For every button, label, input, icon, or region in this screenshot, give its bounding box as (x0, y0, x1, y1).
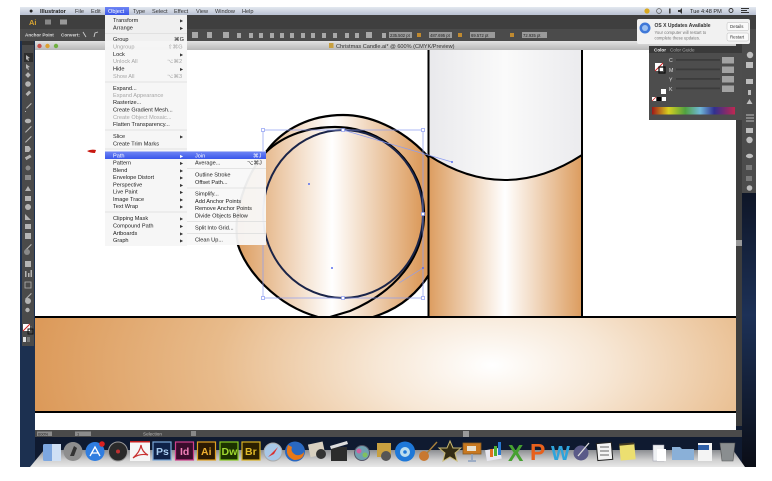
icon: guitar (419, 442, 437, 461)
object menu: Create Gradient Mesh... (113, 108, 173, 114)
notification: OS X updates: complete these updates. (654, 36, 700, 40)
menu bar: Edit (91, 9, 101, 15)
object menu: ▶ (180, 231, 184, 236)
tools panel: ↶ ⬚ (24, 325, 32, 330)
color panel: K (669, 87, 673, 93)
object menu: Expand... (113, 86, 137, 92)
color panel: Color (654, 48, 666, 53)
object menu: ▶ (180, 216, 184, 221)
notification: OS X updates: OS X Updates Available (654, 23, 711, 29)
object menu: Flatten Transparency... (113, 122, 170, 128)
icon: word W: W (551, 443, 570, 465)
object menu: Create Object Mosaic... (113, 115, 172, 121)
control bar: 235.502 pt (390, 33, 411, 38)
object menu: ▶ (180, 197, 184, 202)
icon: bridge: Br (245, 446, 257, 458)
object menu: Graph (113, 238, 129, 244)
icon: safari (264, 443, 282, 461)
icon: document stack (653, 445, 666, 461)
icon: document file (698, 443, 712, 461)
dock shelf (30, 450, 745, 467)
menu bar: Window (215, 9, 236, 15)
icon: dashboard (108, 442, 128, 461)
object menu: ▶ (180, 182, 184, 188)
path submenu: Remove Anchor Points (195, 206, 252, 212)
notification: OS X updates: Restart (730, 34, 745, 40)
color panel: Y (669, 78, 673, 84)
icon: aperture (377, 443, 391, 461)
object menu: ▶ (180, 175, 184, 180)
tools panel (22, 41, 34, 346)
icon: trash (720, 443, 735, 461)
menu bar: Select (152, 9, 168, 15)
object menu: Lock (113, 52, 125, 58)
object menu: Path (113, 154, 125, 160)
object menu: ▶ (180, 52, 184, 57)
icon: stickies note (619, 442, 636, 461)
status bar: Selection (143, 432, 162, 437)
object menu: Expand Appearance (113, 93, 163, 99)
icon: clapperboard (330, 441, 348, 461)
path submenu: Clean Up... (195, 238, 223, 244)
object menu: Image Trace (113, 197, 144, 203)
menu bar: Type (133, 9, 145, 15)
object menu: ▶ (180, 18, 184, 23)
object menu: Pattern (113, 160, 131, 166)
red mark (87, 150, 96, 153)
icon: photoshop: Ps (156, 446, 169, 458)
control bar: 69.572 pt (471, 33, 489, 38)
right side panel dock (736, 41, 756, 426)
candle body (428, 50, 582, 320)
color panel: C (669, 58, 673, 64)
object menu: ▶ (180, 224, 184, 228)
icon: pen and ink (574, 443, 589, 460)
path submenu: ⌘J (253, 152, 262, 160)
icon: finder (43, 444, 61, 461)
path submenu: Offset Path... (195, 180, 228, 186)
icon: applications folder (672, 447, 694, 460)
object menu: ⇧⌘G (168, 44, 183, 50)
notification: OS X updates (637, 19, 750, 44)
icon: acrobat (130, 441, 150, 461)
object menu: Compound Path (113, 224, 153, 230)
control bar: Anchor Point (25, 32, 54, 38)
object menu: ▶ (180, 26, 184, 30)
selection bounding box and handles (262, 128, 453, 300)
icon: color wheel app (354, 446, 370, 460)
icon: indesign (176, 442, 194, 460)
object menu: ⌥⌘3 (167, 73, 182, 80)
control bar: 72.935 pt (523, 33, 541, 38)
path submenu: Split Into Grid... (195, 226, 234, 232)
menu bar: Tue 4:48 PM (690, 9, 722, 15)
control bar (20, 29, 756, 41)
menu bar: ● (29, 8, 33, 15)
path submenu: Divide Objects Below (195, 214, 249, 220)
object menu: Blend (113, 168, 127, 174)
icon: dreamweaver: Dw (222, 446, 238, 458)
icon: illustrator (198, 442, 216, 460)
object menu: ⌘G (174, 36, 184, 43)
menu bar: Illustrator (40, 9, 67, 15)
status bar (35, 430, 742, 437)
icon: excel X: X (508, 440, 524, 466)
object menu: Artboards (113, 231, 137, 237)
notification: OS X updates: Details (730, 24, 744, 29)
icon: numbers (485, 442, 502, 461)
object menu: ▶ (180, 238, 184, 243)
object menu: ▶ (180, 204, 184, 209)
document title bar: Christmas Candle.ai* @ 600% (CMYK/Preview) (336, 44, 455, 50)
path submenu: Outline Stroke (195, 172, 230, 178)
control bar: Convert: (61, 32, 80, 38)
object menu: ▶ (180, 134, 184, 139)
icon: illustrator: Ai (201, 446, 212, 458)
object menu: Transform (113, 18, 139, 24)
illustrator canvas (33, 50, 738, 430)
icon: photoshop (153, 442, 171, 460)
path submenu (187, 151, 266, 245)
object menu: Hide (113, 66, 125, 72)
object menu: Show All (113, 74, 134, 80)
application bar: Ai (29, 18, 36, 27)
object menu: Arrange (113, 26, 133, 32)
path submenu: Join (195, 154, 205, 160)
object menu: Clipping Mask (113, 216, 148, 222)
path submenu: Add Anchor Points (195, 199, 241, 205)
object menu: Group (113, 37, 129, 43)
control bar: 487.695 pt (430, 33, 451, 38)
object menu: Create Trim Marks (113, 142, 159, 148)
icon: indesign: Id (180, 446, 189, 458)
path submenu: Average... (195, 160, 221, 166)
menu bar: Object (108, 9, 125, 15)
menu bar: Effect (174, 9, 189, 15)
document title bar (35, 41, 736, 50)
object menu: Envelope Distort (113, 175, 154, 181)
icon: keynote (463, 443, 481, 461)
notification: OS X updates: Your computer will restart to (654, 30, 707, 35)
object menu: Live Paint (113, 190, 138, 196)
icon: iphoto (308, 441, 326, 459)
color panel: M (669, 68, 673, 74)
menu bar: Help (242, 9, 254, 15)
icon: bridge (242, 442, 260, 460)
object menu (105, 15, 187, 246)
object menu: Text Wrap (113, 204, 138, 210)
object menu: Slice (113, 134, 125, 140)
color panel (649, 46, 742, 120)
object menu: ▶ (180, 168, 184, 173)
icon: launchpad (64, 442, 82, 461)
icon: reminders list (596, 442, 613, 461)
color panel: Color Guide (670, 48, 695, 53)
icon: firefox (285, 442, 305, 462)
object menu: Rasterize... (113, 100, 142, 106)
menu bar: View (196, 9, 209, 15)
menu bar: File (75, 9, 84, 15)
icon: imovie star (439, 441, 461, 461)
icon: dvd player (395, 442, 415, 462)
object menu: ▶ (180, 66, 184, 72)
application bar (20, 15, 756, 29)
path submenu: Simplify... (195, 192, 219, 198)
status bar: 1 (77, 432, 80, 436)
object menu: ⌥⌘2 (167, 58, 182, 65)
menu bar (20, 7, 756, 15)
candle base (33, 317, 738, 412)
ornament ball (237, 115, 430, 317)
status bar: 600% (38, 432, 49, 436)
object menu: Unlock All (113, 59, 138, 65)
icon: dreamweaver (220, 442, 238, 460)
object menu: ▶ (180, 190, 184, 194)
object menu: Perspective (113, 182, 142, 188)
object menu: ▶ (180, 160, 184, 166)
icon: powerpoint P: P (530, 439, 545, 465)
path submenu: ⌥⌘J (247, 160, 262, 166)
icon: app store (86, 441, 105, 461)
object menu: Ungroup (113, 44, 134, 50)
dock (30, 439, 745, 467)
object menu: ▶ (180, 154, 184, 158)
